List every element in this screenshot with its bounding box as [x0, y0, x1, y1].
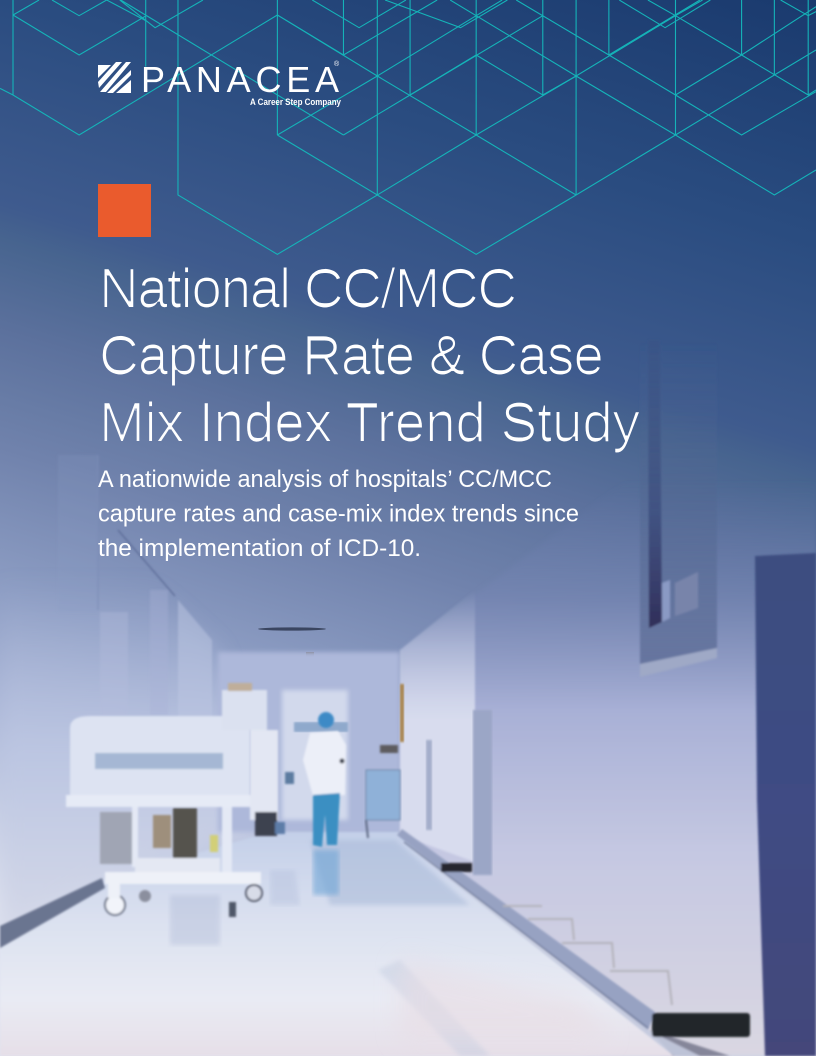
corridor side wall right	[400, 590, 475, 862]
title	[99, 257, 640, 453]
title: National CC/MCC	[99, 257, 517, 319]
logo: Panacea	[98, 59, 342, 108]
nurse walking down corridor	[303, 712, 346, 847]
window on right wall	[640, 340, 717, 677]
door on right	[755, 553, 816, 1056]
right wall	[400, 470, 816, 1056]
pillar	[473, 710, 492, 875]
subtitle	[98, 466, 579, 562]
left wall panels	[58, 455, 212, 720]
floor	[0, 832, 676, 1056]
orange square accent	[98, 184, 151, 237]
hospital bed	[66, 716, 266, 917]
corridor end wall	[218, 652, 400, 832]
subtitle: A nationwide analysis of hospitals’ CC/MCC	[98, 466, 552, 493]
subtitle: capture rates and case-mix index trends since	[98, 500, 579, 528]
right floor rail	[397, 829, 750, 1056]
floor reflections	[170, 840, 610, 1056]
registered mark: ®	[334, 60, 340, 68]
equipment along corridor	[222, 683, 294, 836]
title: Mix Index Trend Study	[99, 391, 640, 453]
geometric teal line pattern	[0, 0, 816, 255]
wordmark: PANACEA	[141, 59, 339, 100]
left wall	[0, 550, 270, 940]
tagline: A Career Step Company	[250, 97, 342, 108]
ceiling vent	[258, 627, 326, 631]
title: Capture Rate & Case	[99, 324, 604, 386]
cart	[366, 745, 400, 838]
subtitle: the implementation of ICD-10.	[98, 535, 421, 562]
left floor rail	[0, 878, 105, 948]
amber wall strip	[400, 684, 404, 742]
icon: logo mark	[98, 62, 131, 93]
